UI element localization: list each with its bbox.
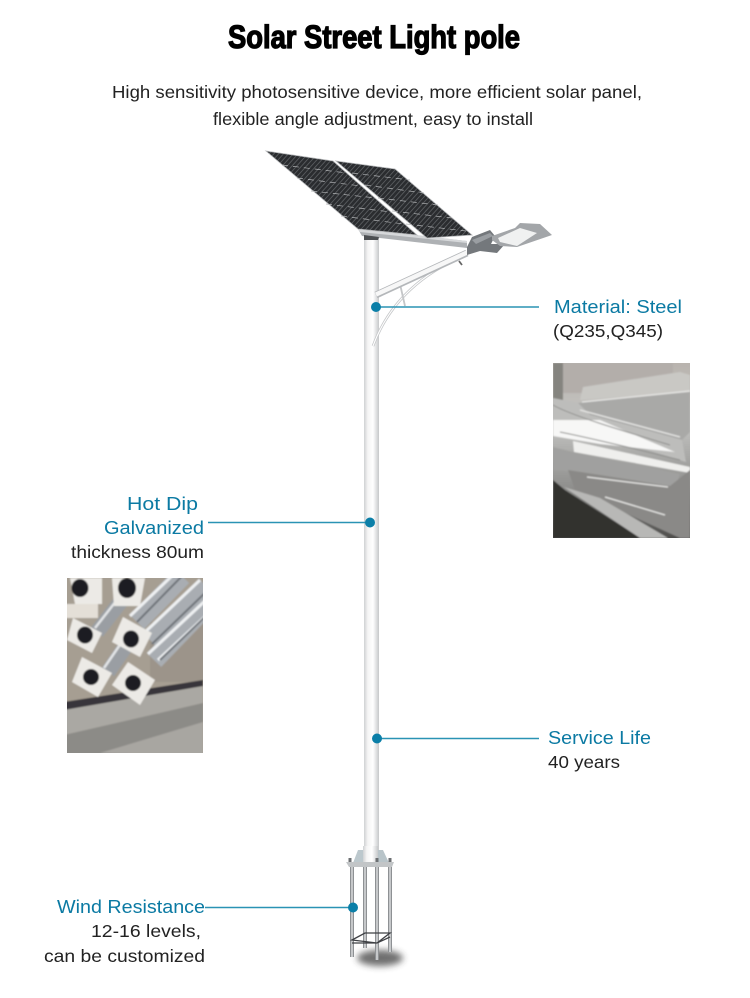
pole shaft [364, 238, 379, 856]
callout: material steel: (Q235,Q345) [553, 321, 663, 341]
ground base cage [346, 846, 403, 966]
subtitle: High sensitivity photosensitive device, more efficient solar panel, [112, 82, 642, 102]
curved lamp arm [373, 252, 467, 346]
callout: hot dip galvanized [71, 493, 375, 562]
callout: service life: Service Life [548, 727, 651, 748]
callout: material steel [371, 296, 682, 341]
solar panel left [266, 151, 417, 235]
photo: galvanized poles [67, 578, 203, 753]
callout: wind resistance [44, 896, 358, 966]
callout: wind resistance: can be customized [44, 946, 205, 966]
LED lamp head [467, 223, 552, 255]
subtitle [112, 82, 642, 129]
callout: service life [372, 727, 651, 772]
callout: wind resistance: Wind Resistance [57, 896, 205, 917]
callout: hot dip galvanized: thickness 80um [71, 542, 204, 562]
solar panel bracket [358, 229, 467, 248]
solar panel right [336, 161, 472, 238]
street light pole [266, 151, 552, 966]
title: Solar Street Light pole [228, 19, 520, 55]
photo: welded steel [550, 360, 693, 541]
callout: material steel: Material: Steel [554, 296, 682, 317]
subtitle: flexible angle adjustment, easy to install [213, 109, 533, 129]
callout: wind resistance: 12-16 levels, [91, 921, 201, 941]
callout: service life: 40 years [548, 752, 620, 772]
callout: hot dip galvanized: Hot Dip [127, 493, 198, 514]
callout: hot dip galvanized: Galvanized [104, 517, 204, 538]
